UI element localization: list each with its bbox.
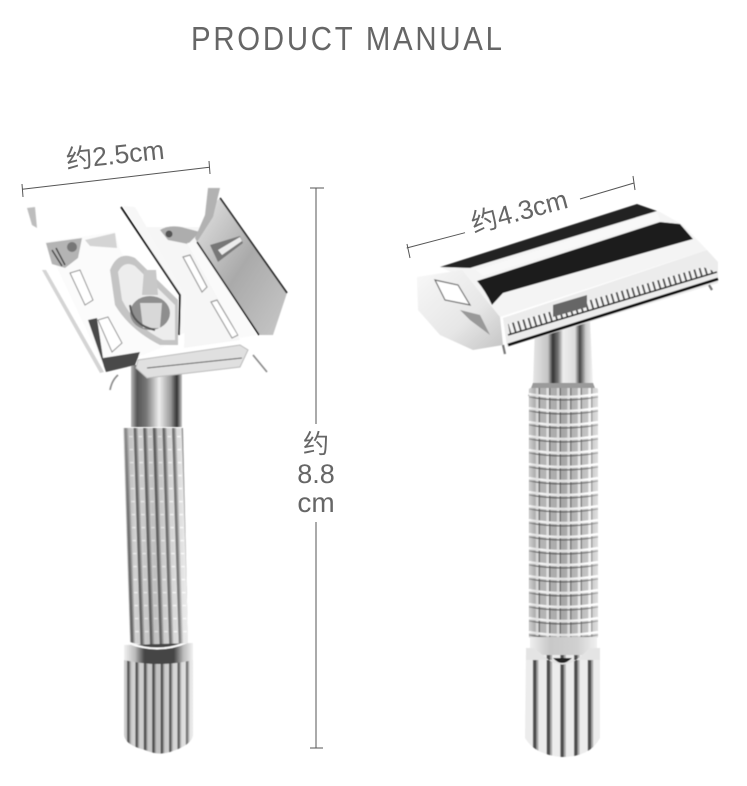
dimension: head width right: 约4.3cm <box>468 184 571 239</box>
razor: open butterfly head <box>27 188 287 427</box>
collar <box>530 637 597 657</box>
left flap details <box>46 238 82 268</box>
left flap <box>45 232 180 365</box>
comb teeth <box>508 267 716 335</box>
center white bar <box>476 212 660 276</box>
handle knurling <box>123 428 188 648</box>
top cap <box>440 204 707 317</box>
left end cap <box>417 270 503 350</box>
dimension: height: cm <box>297 487 335 518</box>
knurl rows <box>529 394 598 635</box>
upper dark band <box>440 204 657 268</box>
dimension: height <box>297 188 335 748</box>
bottom bar <box>136 345 248 378</box>
right wing panel <box>197 198 287 335</box>
dimension: head width right <box>407 176 635 258</box>
dimension: head width left <box>22 135 210 197</box>
dimension: head width left: 约2.5cm <box>64 135 166 175</box>
handle shading <box>123 428 188 648</box>
comb guard <box>503 250 718 347</box>
neck <box>533 320 593 385</box>
right wing band <box>187 242 257 338</box>
middle wing band <box>123 206 187 335</box>
comb lines <box>508 272 717 335</box>
handle shading <box>529 388 598 638</box>
handle knurling <box>529 388 598 638</box>
knob <box>525 648 600 758</box>
right center plate <box>143 227 240 348</box>
left wing top <box>27 207 37 228</box>
center pressure plate <box>110 256 178 345</box>
left wing edge strip <box>42 270 104 373</box>
knob <box>124 642 193 754</box>
knurl shadows <box>529 397 598 638</box>
razor: open handle <box>120 428 196 760</box>
flared base of neck <box>528 383 598 396</box>
right wing strut <box>195 188 220 242</box>
lower dark band <box>477 222 693 305</box>
razor: closed handle <box>525 382 600 758</box>
center post <box>142 270 158 295</box>
neck <box>131 365 182 427</box>
dimension: height: 约 <box>303 429 329 459</box>
razor: closed head <box>417 204 718 385</box>
clips <box>110 355 267 390</box>
title: PRODUCT MANUAL <box>191 20 505 57</box>
dimension: height: 8.8 <box>297 459 335 489</box>
flap windows <box>70 270 122 352</box>
